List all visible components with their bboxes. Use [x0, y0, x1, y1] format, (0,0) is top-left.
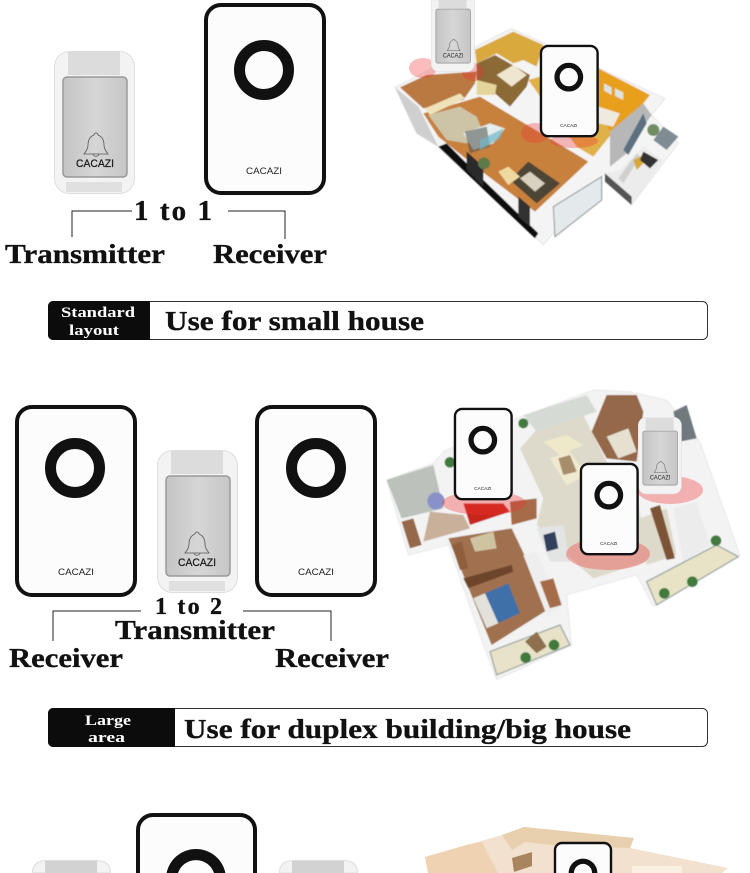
device: receiver: CACAZI: [246, 166, 282, 176]
banner: use for small house: [48, 301, 708, 340]
label: 1 to 2: 1 to 2: [155, 594, 222, 620]
panel: 1 to 1 standard layout: [5, 0, 708, 340]
device: receiver overlay: [541, 46, 598, 136]
connector lines: [53, 611, 331, 641]
device: center transmitter: CACAZI: [178, 557, 216, 569]
device: transmitter: CACAZI: [76, 158, 114, 170]
device: right receiver: [257, 407, 375, 595]
device: left transmitter: [32, 860, 110, 873]
label: transmitter: Transmitter: [115, 615, 275, 645]
device: right receiver: CACAZI: [298, 567, 334, 577]
banner: use for duplex building: area: [88, 730, 126, 746]
label: transmitter: Transmitter: [5, 239, 165, 269]
device: center transmitter: [158, 450, 238, 592]
red signal glow: [409, 58, 598, 148]
red signal glow: [442, 476, 703, 570]
device: transmitter overlay: [431, 0, 474, 72]
illustration: house interior: [425, 827, 728, 873]
panel: third layout, cropped at bottom: [32, 815, 728, 873]
label: right receiver: Receiver: [275, 643, 389, 673]
device: transmitter: [54, 52, 134, 194]
label: left receiver: Receiver: [9, 643, 123, 673]
banner: use for small house: Standard: [61, 305, 136, 321]
banner: use for duplex building: Use for duplex building/big house: [184, 714, 631, 744]
banner: use for duplex building: Large: [85, 713, 131, 729]
device: right transmitter: [280, 860, 358, 873]
house floor plan: [395, 28, 678, 245]
device: receiver overlay center: [581, 464, 638, 554]
label: 1 to 1: 1 to 1: [134, 195, 212, 227]
device: receiver overlay left: CACAZI: [474, 486, 491, 491]
illustration: big house: [387, 390, 740, 680]
device: receiver overlay left: [455, 409, 512, 499]
illustration: small house: [395, 0, 678, 245]
house floor plan: [387, 390, 740, 680]
device: transmitter overlay: CACAZI: [443, 54, 464, 60]
connector lines: [72, 211, 285, 239]
label: receiver: Receiver: [213, 239, 327, 269]
device: left receiver: CACAZI: [58, 567, 94, 577]
device: receiver overlay: [555, 843, 611, 873]
panel: 1 to 2 large area: [9, 390, 740, 747]
device: transmitter overlay: [638, 417, 681, 494]
device: receiver overlay center: CACAZI: [600, 541, 617, 546]
device: center receiver: [138, 815, 255, 873]
device: transmitter overlay: CACAZI: [650, 476, 671, 482]
banner: use for small house: layout: [69, 323, 119, 339]
banner: use for duplex building: [48, 708, 708, 747]
device: receiver overlay: CACAZI: [560, 123, 577, 128]
device: left receiver: [17, 407, 135, 595]
banner: use for small house: Use for small house: [165, 306, 424, 336]
device: receiver: [206, 5, 324, 193]
